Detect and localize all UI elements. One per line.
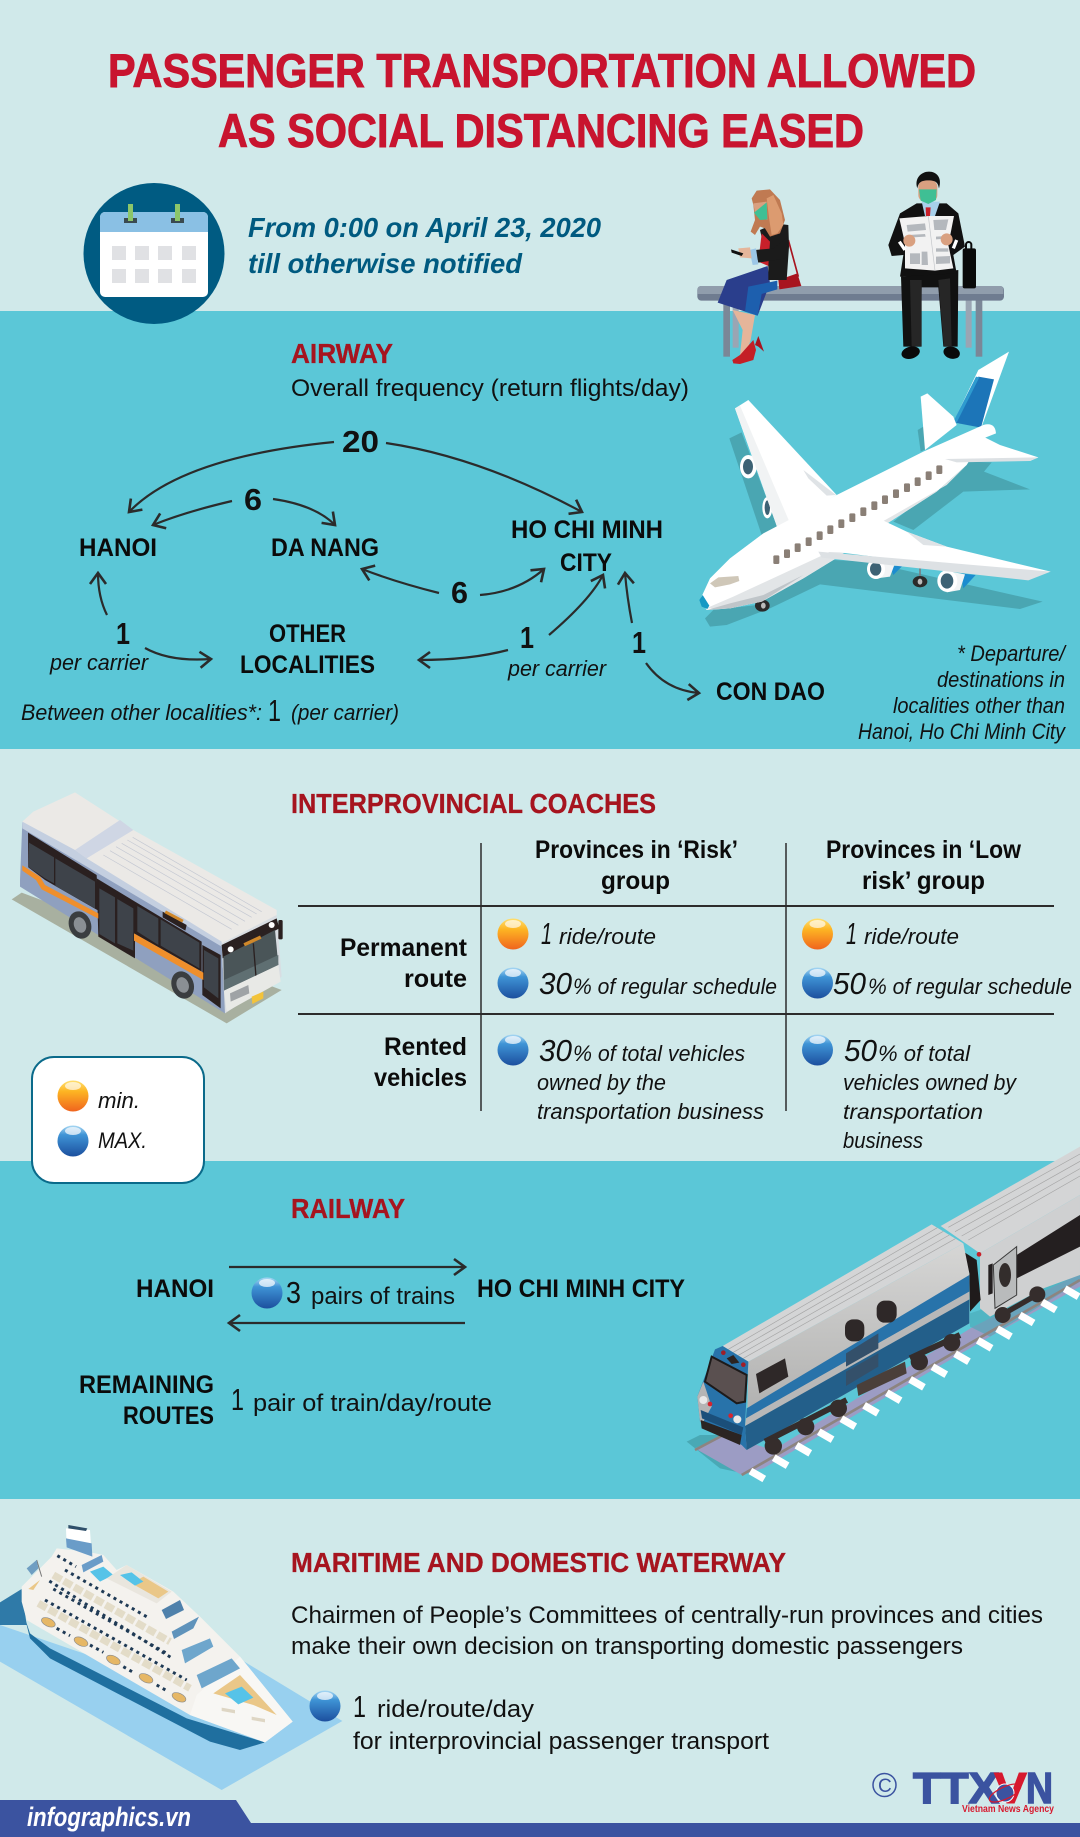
date text: From 0:00 on April 23, 2020 xyxy=(248,212,601,243)
route diagram xyxy=(49,424,825,706)
remaining routes value: 1 xyxy=(231,1382,244,1417)
legend: min. xyxy=(98,1088,140,1113)
description: make their own decision on transporting domestic passengers xyxy=(291,1633,963,1660)
title xyxy=(108,44,976,157)
cell: risk permanent: ride/route xyxy=(559,924,656,949)
cell: low risk rented: vehicles owned by xyxy=(843,1070,1018,1095)
footer bar xyxy=(0,1800,1080,1837)
icon: calendar xyxy=(84,183,224,324)
between localities note xyxy=(21,693,399,728)
numbers xyxy=(116,424,646,660)
place labels xyxy=(79,516,825,706)
cell: low risk rented: % of total xyxy=(878,1041,971,1066)
cell: low risk permanent: 50 xyxy=(833,966,866,1001)
woman xyxy=(718,189,801,364)
numbers: 1 xyxy=(632,625,646,660)
between localities note: (per carrier) xyxy=(291,700,399,725)
numbers: 6 xyxy=(451,575,468,610)
man xyxy=(888,172,976,361)
place labels: DA NANG xyxy=(271,534,379,562)
panel: interprovincial coaches xyxy=(12,788,1072,1153)
table headers: group xyxy=(601,867,670,895)
title: PASSENGER TRANSPORTATION ALLOWED xyxy=(108,44,976,97)
row labels: vehicles xyxy=(374,1064,467,1092)
cell: risk permanent: 30 xyxy=(539,966,572,1001)
remaining routes value: pair of train/day/route xyxy=(253,1390,492,1417)
numbers: 1 xyxy=(520,620,534,655)
place labels: CON DAO xyxy=(716,678,825,706)
row labels xyxy=(340,934,468,1092)
cell: risk rented xyxy=(498,1033,764,1124)
max ride value: 1 xyxy=(353,1689,366,1724)
per carrier notes: per carrier xyxy=(49,650,150,675)
route labels: HO CHI MINH CITY xyxy=(477,1275,685,1303)
between localities note: 1 xyxy=(268,693,281,728)
place labels: CITY xyxy=(560,549,612,577)
description: Chairmen of People’s Committees of centrally-run provinces and cities xyxy=(291,1602,1043,1629)
max ride value xyxy=(310,1689,769,1755)
cell: risk rented: owned by the xyxy=(537,1070,666,1095)
illustration: airplane xyxy=(699,352,1051,627)
arrows xyxy=(98,442,699,693)
heading: coaches: INTERPROVINCIAL COACHES xyxy=(291,788,656,819)
table headers: Provinces in ‘Low xyxy=(826,836,1021,864)
table headers: risk’ group xyxy=(862,867,985,895)
cell: low risk permanent xyxy=(802,916,1072,1001)
logo: TTXVN: Vietnam News Agency xyxy=(962,1804,1054,1815)
arrow: to Hanoi xyxy=(229,1322,465,1324)
per carrier notes: per carrier xyxy=(507,656,608,681)
row labels: Rented xyxy=(384,1033,467,1061)
row labels: Permanent xyxy=(340,934,468,962)
cell: risk permanent xyxy=(498,916,777,1001)
panel: railway xyxy=(79,1147,1080,1482)
cell: risk permanent: 1 xyxy=(541,916,552,951)
table xyxy=(298,836,1072,1153)
table headers: Provinces in ‘Risk’ xyxy=(535,836,738,864)
logo: TTXVN: C xyxy=(878,1776,892,1797)
place labels: HO CHI MINH xyxy=(511,516,663,544)
cell: risk rented: 30 xyxy=(539,1033,572,1068)
second carriage xyxy=(980,1195,1080,1317)
panel: maritime and domestic waterway xyxy=(0,1525,1043,1790)
max trains value: pairs of trains xyxy=(311,1283,455,1310)
cell: low risk rented: 50 xyxy=(844,1033,877,1068)
illustration: cruise ship xyxy=(0,1525,342,1790)
cell: low risk rented: business xyxy=(843,1128,923,1153)
max trains value: 3 xyxy=(286,1275,301,1310)
numbers: 6 xyxy=(244,482,262,517)
cell: low risk permanent: % of regular schedule xyxy=(868,974,1072,999)
place labels: HANOI xyxy=(79,534,157,562)
arrow: to Ho Chi Minh City xyxy=(229,1266,465,1268)
per carrier notes xyxy=(49,650,608,681)
route labels: REMAINING xyxy=(79,1371,214,1399)
logo: TTXVN: N xyxy=(1026,1764,1053,1813)
illustration: passengers on bench xyxy=(697,172,1004,364)
cell: low risk permanent: 1 xyxy=(846,916,857,951)
cell: low risk permanent: ride/route xyxy=(864,924,959,949)
logo: TTXVN: TTX xyxy=(913,1764,999,1813)
max trains value xyxy=(252,1275,455,1310)
footnote xyxy=(858,641,1067,744)
heading: railway: RAILWAY xyxy=(291,1193,405,1224)
route labels: HANOI xyxy=(136,1275,214,1303)
title: AS SOCIAL DISTANCING EASED xyxy=(218,104,864,157)
cell: risk rented: % of total vehicles xyxy=(573,1041,745,1066)
date text: till otherwise notified xyxy=(248,248,523,279)
row labels: route xyxy=(404,965,467,993)
heading: airway: AIRWAY xyxy=(291,338,393,369)
cell: low risk rented: transportation xyxy=(843,1101,983,1124)
route labels: ROUTES xyxy=(123,1402,214,1430)
subheading: Overall frequency (return flights/day) xyxy=(291,375,689,402)
heading: maritime: MARITIME AND DOMESTIC WATERWAY xyxy=(291,1547,786,1578)
illustration: bus xyxy=(12,792,283,1023)
remaining routes value xyxy=(231,1382,492,1417)
max ride value: ride/route/day xyxy=(377,1696,534,1723)
illustration: train xyxy=(687,1147,1080,1482)
place labels: LOCALITIES xyxy=(240,651,375,679)
cell: risk rented: transportation business xyxy=(537,1099,764,1124)
logo: TTXVN: V xyxy=(994,1764,1028,1813)
footnote: * Departure/ xyxy=(957,641,1067,666)
logo: TTXVN xyxy=(873,1764,1054,1815)
numbers: 1 xyxy=(116,616,130,651)
between localities note: Between other localities*: xyxy=(21,700,262,725)
route labels xyxy=(79,1275,685,1430)
footer bar: infographics.vn xyxy=(27,1802,191,1832)
panel: airway xyxy=(21,338,1067,744)
legend xyxy=(32,1057,204,1183)
footnote: destinations in xyxy=(937,667,1065,692)
place labels: OTHER xyxy=(269,620,346,648)
max ride value: for interprovincial passenger transport xyxy=(353,1728,769,1755)
legend: MAX. xyxy=(98,1128,147,1153)
description xyxy=(291,1602,1043,1660)
date text xyxy=(248,212,601,279)
cell: low risk rented xyxy=(802,1033,1018,1153)
footnote: localities other than xyxy=(893,693,1065,718)
numbers: 20 xyxy=(342,424,379,459)
locomotive xyxy=(747,1243,969,1450)
table headers xyxy=(535,836,1021,895)
cell: risk permanent: % of regular schedule xyxy=(573,974,777,999)
